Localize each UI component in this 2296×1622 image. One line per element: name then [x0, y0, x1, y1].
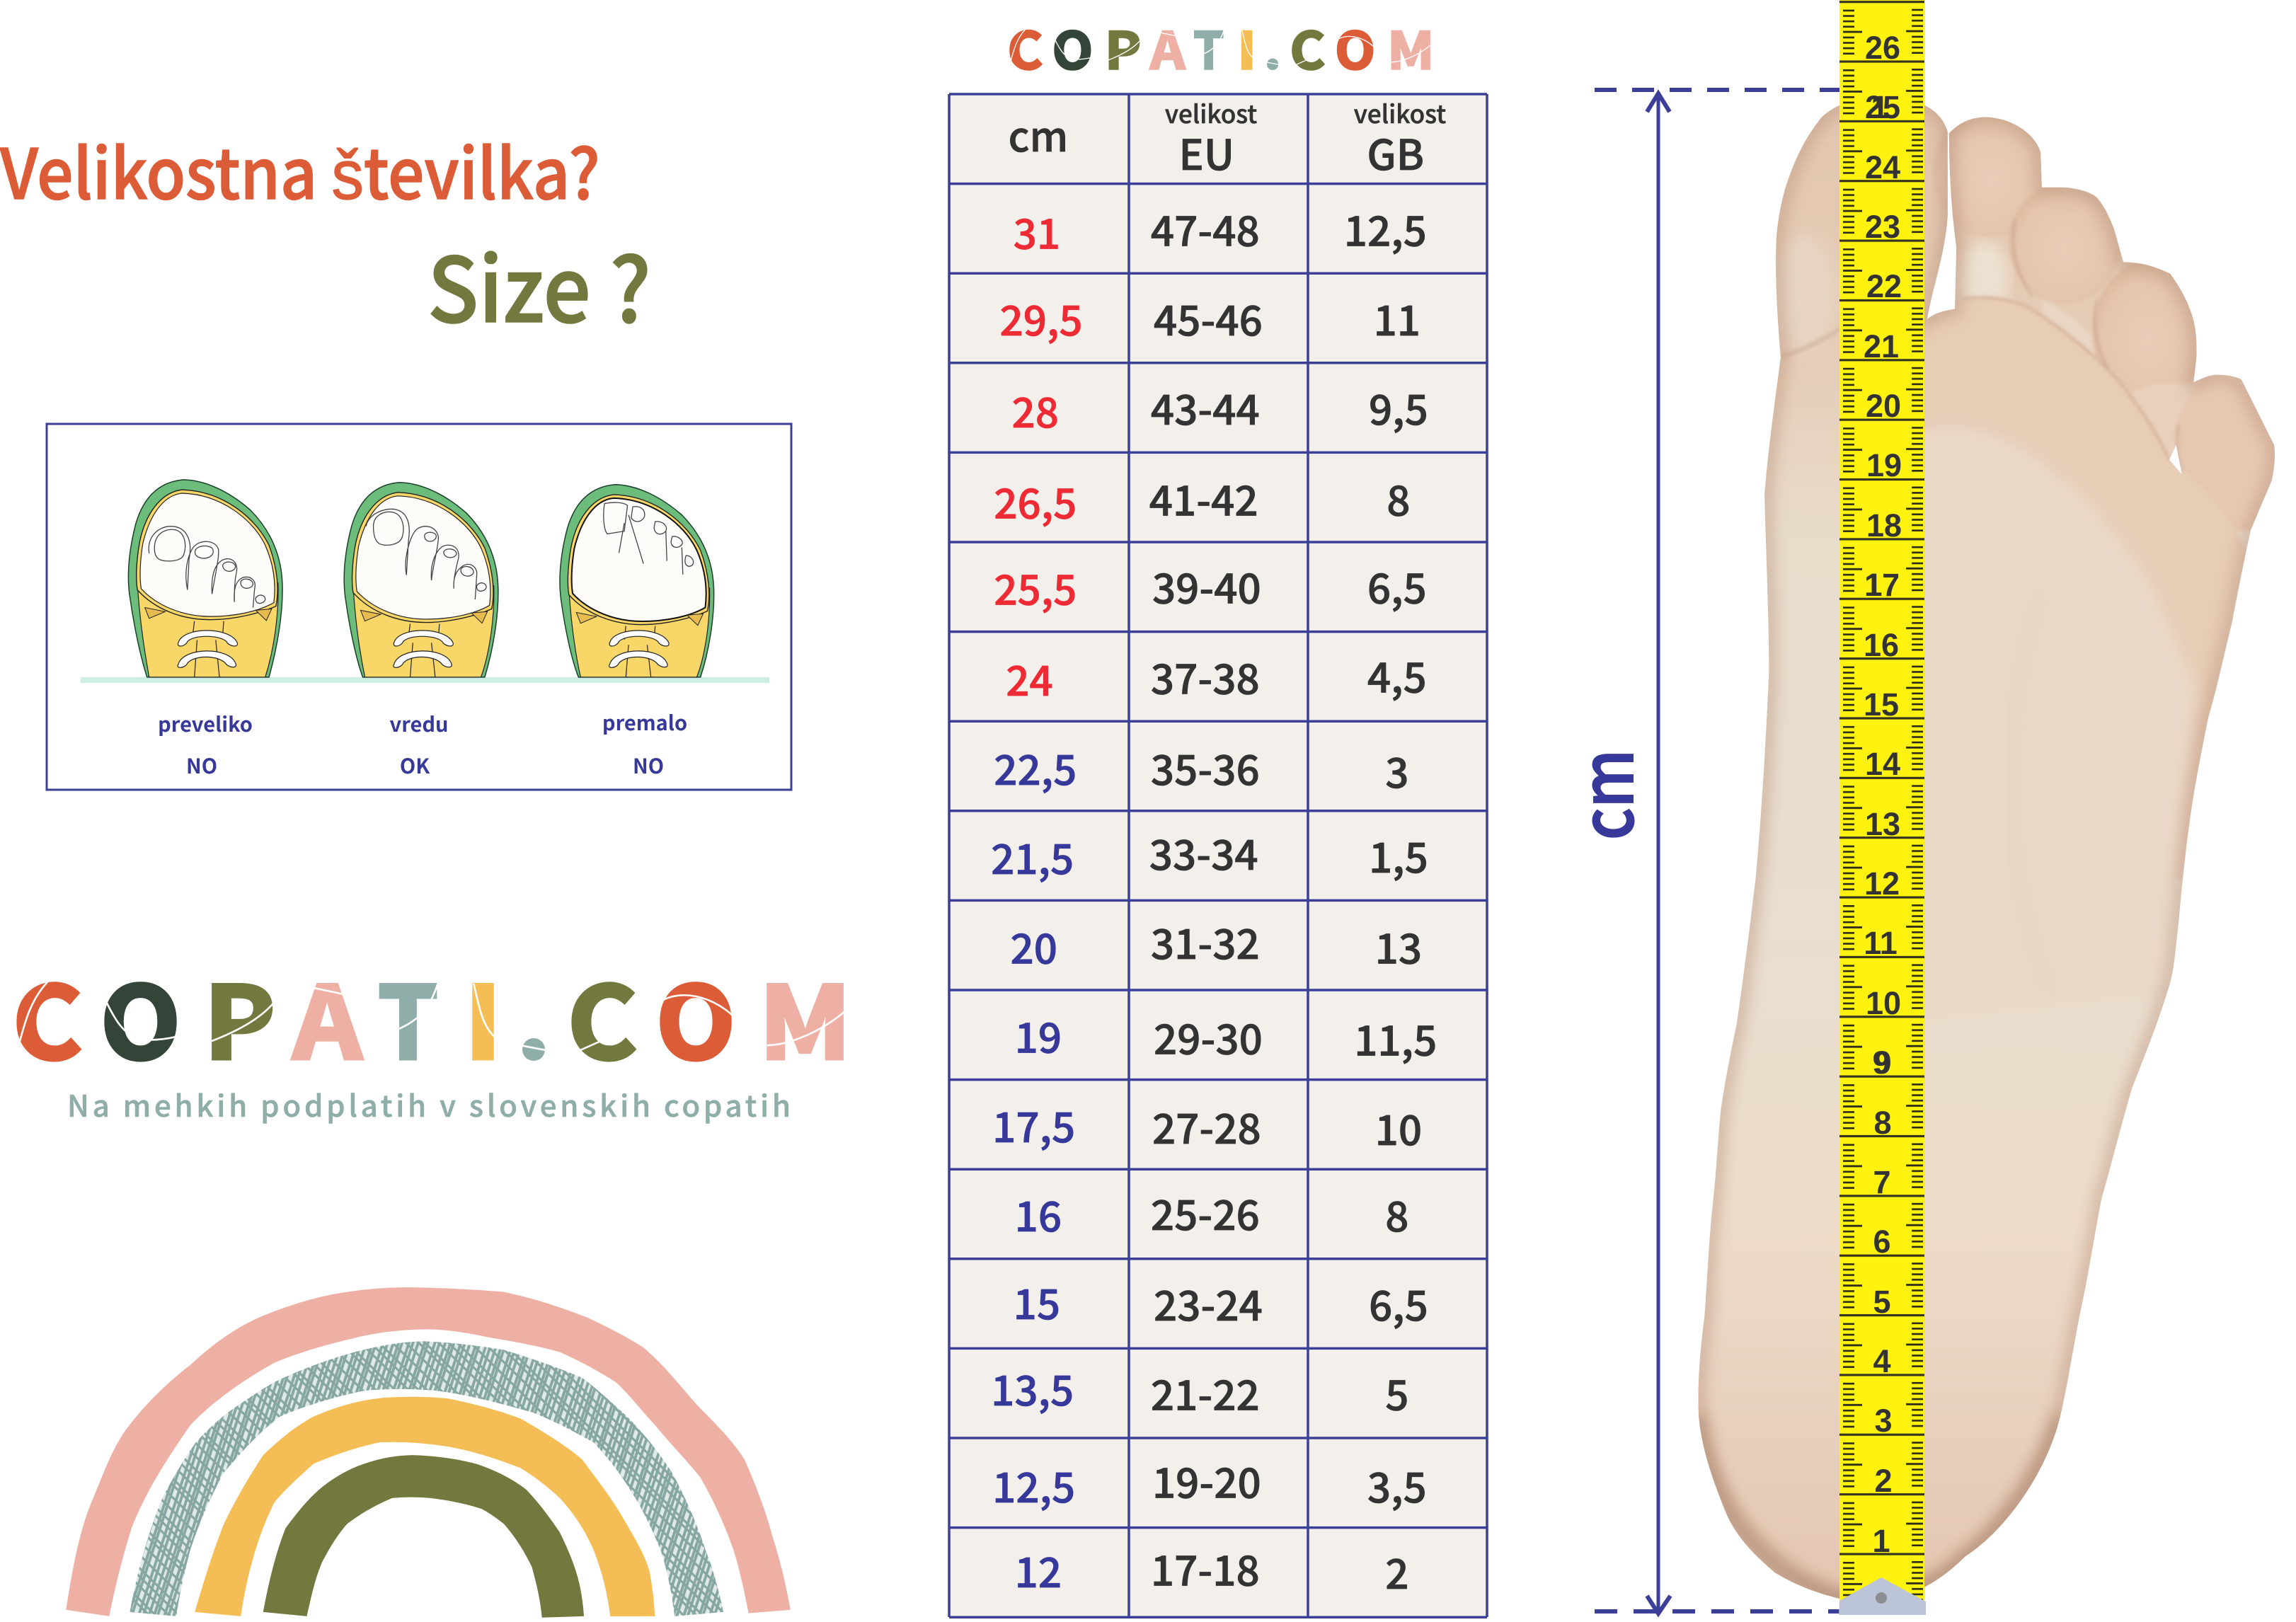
- row 12,5: [992, 1450, 1427, 1514]
- row 24: 24: [1006, 648, 1053, 708]
- row 16: [1015, 1182, 1408, 1243]
- row 15: [1014, 1271, 1428, 1333]
- table: size chart: [949, 94, 1487, 1617]
- row 13,5: 21-22: [1151, 1362, 1260, 1422]
- tape numbers: 25: [1865, 89, 1900, 125]
- row 22,5: [994, 737, 1408, 800]
- tape numbers: 6: [1873, 1224, 1891, 1260]
- row 20: [1010, 911, 1422, 975]
- tape numbers: 7: [1873, 1164, 1891, 1200]
- tape numbers: 21: [1864, 328, 1899, 364]
- row 25,5: 39-40: [1152, 555, 1261, 615]
- label: NO left: NO: [186, 750, 217, 780]
- logo: COPATI.COM large: A: [292, 943, 362, 1088]
- row 15: 23-24: [1154, 1272, 1263, 1333]
- tape numbers: 26: [1865, 30, 1900, 66]
- row 26,5: [994, 467, 1411, 530]
- icon: shoe too small: [560, 485, 714, 677]
- logo: COPATI.COM small: O: [1335, 9, 1375, 84]
- tape numbers: 1: [1872, 1523, 1890, 1559]
- row 20: 31-32: [1151, 911, 1260, 971]
- logo: COPATI.COM small: M: [1387, 9, 1435, 84]
- row 26,5: 41-42: [1149, 467, 1258, 527]
- logo: COPATI.COM large: P: [204, 943, 275, 1088]
- row 28: 43-44: [1151, 376, 1260, 437]
- tape numbers: 22: [1866, 268, 1902, 304]
- icon: shoe correct fit: [344, 483, 498, 677]
- tape numbers: 20: [1866, 388, 1901, 424]
- row 20: 13: [1375, 915, 1422, 975]
- row 13,5: 5: [1385, 1362, 1408, 1422]
- row 12: 12: [1015, 1539, 1062, 1599]
- tape numbers: [1864, 30, 1902, 1559]
- row 15: 6,5: [1369, 1272, 1428, 1333]
- row 15: 15: [1014, 1271, 1060, 1331]
- measuring tape: [1839, 0, 1926, 1615]
- row 17,5: 27-28: [1152, 1095, 1261, 1156]
- tape numbers: 19: [1866, 447, 1902, 483]
- logo: COPATI.COM large: [13, 943, 851, 1088]
- row 28: 9,5: [1369, 376, 1428, 437]
- table header row: [1009, 95, 1446, 182]
- table header row: velikost: [1165, 95, 1257, 131]
- row 29,5: [999, 287, 1420, 347]
- row 25,5: [994, 555, 1427, 616]
- tape numbers: 10: [1866, 985, 1901, 1021]
- tape numbers: 11: [1864, 925, 1898, 961]
- row 13,5: 13,5: [991, 1357, 1074, 1417]
- tape numbers: 3: [1874, 1403, 1893, 1439]
- logo: COPATI.COM small: C: [1007, 9, 1043, 84]
- logo: COPATI.COM small: P: [1105, 9, 1141, 84]
- logo: COPATI.COM small: A: [1149, 9, 1186, 84]
- row 19: 11,5: [1354, 1008, 1437, 1068]
- label: OK: OK: [400, 750, 430, 780]
- tape numbers: 16: [1864, 627, 1899, 663]
- tape numbers: 4: [1873, 1343, 1891, 1379]
- tape numbers: 12: [1864, 865, 1900, 902]
- logo: COPATI.COM large: C: [568, 943, 637, 1088]
- title: Size: Size ?: [427, 219, 651, 348]
- row 12,5: 12,5: [992, 1454, 1075, 1514]
- row 31: [1014, 198, 1427, 261]
- illustration: rainbow: [66, 1287, 791, 1618]
- row 12: 2: [1385, 1541, 1408, 1601]
- row 24: 4,5: [1367, 645, 1427, 705]
- arrow: vertical length arrow: [1647, 93, 1670, 1614]
- row 22,5: 35-36: [1151, 737, 1260, 797]
- table header row: GB: [1367, 122, 1424, 182]
- row 31: 47-48: [1151, 198, 1260, 258]
- row 22,5: 22,5: [994, 737, 1077, 797]
- foot: [1684, 88, 2285, 1611]
- table header row: EU: [1179, 122, 1234, 182]
- row 31: 12,5: [1344, 198, 1427, 258]
- label: preveliko: preveliko: [158, 708, 253, 738]
- row 25,5: 6,5: [1367, 555, 1427, 615]
- row 16: 16: [1015, 1183, 1062, 1243]
- tape end hook: [1839, 1577, 1926, 1615]
- logo: COPATI.COM large: M: [759, 943, 851, 1088]
- row 29,5: 11: [1374, 287, 1420, 347]
- label: premalo: premalo: [602, 707, 687, 737]
- logo: COPATI.COM small: C: [1290, 9, 1325, 84]
- logo: COPATI.COM small: [1007, 9, 1435, 84]
- row 17,5: 17,5: [992, 1094, 1075, 1154]
- row 21,5: 33-34: [1149, 822, 1258, 882]
- tape numbers: 17: [1864, 567, 1900, 603]
- tape numbers: 2: [1874, 1463, 1893, 1499]
- logo: COPATI.COM small: T: [1193, 9, 1224, 84]
- tape numbers: 8: [1873, 1105, 1892, 1141]
- tape numbers: 1: [1864, 567, 1883, 603]
- tape numbers: 18: [1866, 507, 1902, 543]
- icon: shoe too big: [128, 480, 282, 677]
- row 12,5: 3,5: [1367, 1454, 1427, 1514]
- row 29,5: 45-46: [1154, 287, 1263, 347]
- measure label: cm: cm: [1551, 749, 1653, 840]
- tagline: Na mehkih podplatih v slovenskih copatih: [67, 1083, 791, 1126]
- row 12: [1015, 1538, 1408, 1601]
- row 28: [1012, 376, 1428, 439]
- logo: COPATI.COM large: O: [101, 943, 180, 1088]
- ground line: [81, 677, 769, 683]
- row 13,5: [991, 1357, 1408, 1422]
- row 24: [1006, 645, 1427, 708]
- row 21,5: 21,5: [991, 826, 1074, 886]
- row 25,5: 25,5: [994, 556, 1077, 616]
- row 29,5: 29,5: [999, 287, 1083, 347]
- tape numbers: 14: [1865, 746, 1900, 782]
- row 31: 31: [1014, 201, 1060, 261]
- logo: COPATI.COM small: I: [1237, 9, 1257, 84]
- row 16: 25-26: [1151, 1182, 1260, 1242]
- table header row: cm: [1009, 104, 1068, 163]
- label: NO right: NO: [633, 750, 664, 780]
- row 21,5: [991, 822, 1428, 886]
- row 21,5: 1,5: [1369, 824, 1428, 885]
- logo: COPATI.COM large: C: [13, 943, 82, 1088]
- row 28: 28: [1012, 379, 1059, 439]
- tape numbers: 13: [1865, 806, 1900, 842]
- row 17,5: 10: [1375, 1097, 1422, 1157]
- tape numbers: 9: [1873, 1045, 1892, 1081]
- tape numbers: 23: [1865, 209, 1900, 245]
- row 12,5: 19-20: [1152, 1450, 1261, 1510]
- tape numbers: 5: [1873, 1284, 1891, 1320]
- row 20: 20: [1010, 915, 1057, 975]
- panel: shoe fit comparison: [47, 424, 791, 790]
- logo: COPATI.COM large: T: [378, 943, 438, 1088]
- tape numbers: 1: [1871, 89, 1889, 125]
- row 19: [1015, 1005, 1437, 1068]
- logo: COPATI.COM large: I: [464, 943, 503, 1088]
- row 24: 37-38: [1151, 646, 1260, 706]
- row 17,5: [992, 1094, 1422, 1157]
- tape numbers: 9: [1872, 1045, 1890, 1081]
- logo: COPATI.COM small: O: [1052, 9, 1093, 84]
- row 19: 29-30: [1154, 1006, 1263, 1066]
- row 19: 19: [1015, 1005, 1062, 1065]
- dimension: bottom dashed line: [1595, 1609, 1839, 1614]
- title: Velikostna številka: Velikostna številka?: [0, 120, 600, 219]
- row 12: 17-18: [1151, 1538, 1260, 1598]
- logo: COPATI.COM large: O: [656, 943, 735, 1088]
- table header row: velikost: [1354, 95, 1446, 131]
- tape numbers: 24: [1865, 149, 1900, 185]
- row 22,5: 3: [1385, 740, 1408, 800]
- tape numbers: 15: [1864, 686, 1899, 723]
- row 26,5: 26,5: [994, 470, 1077, 530]
- dimension: top dashed line: [1595, 88, 1839, 92]
- row 26,5: 8: [1387, 467, 1411, 527]
- label: vredu: vredu: [389, 708, 449, 738]
- row 16: 8: [1385, 1183, 1408, 1243]
